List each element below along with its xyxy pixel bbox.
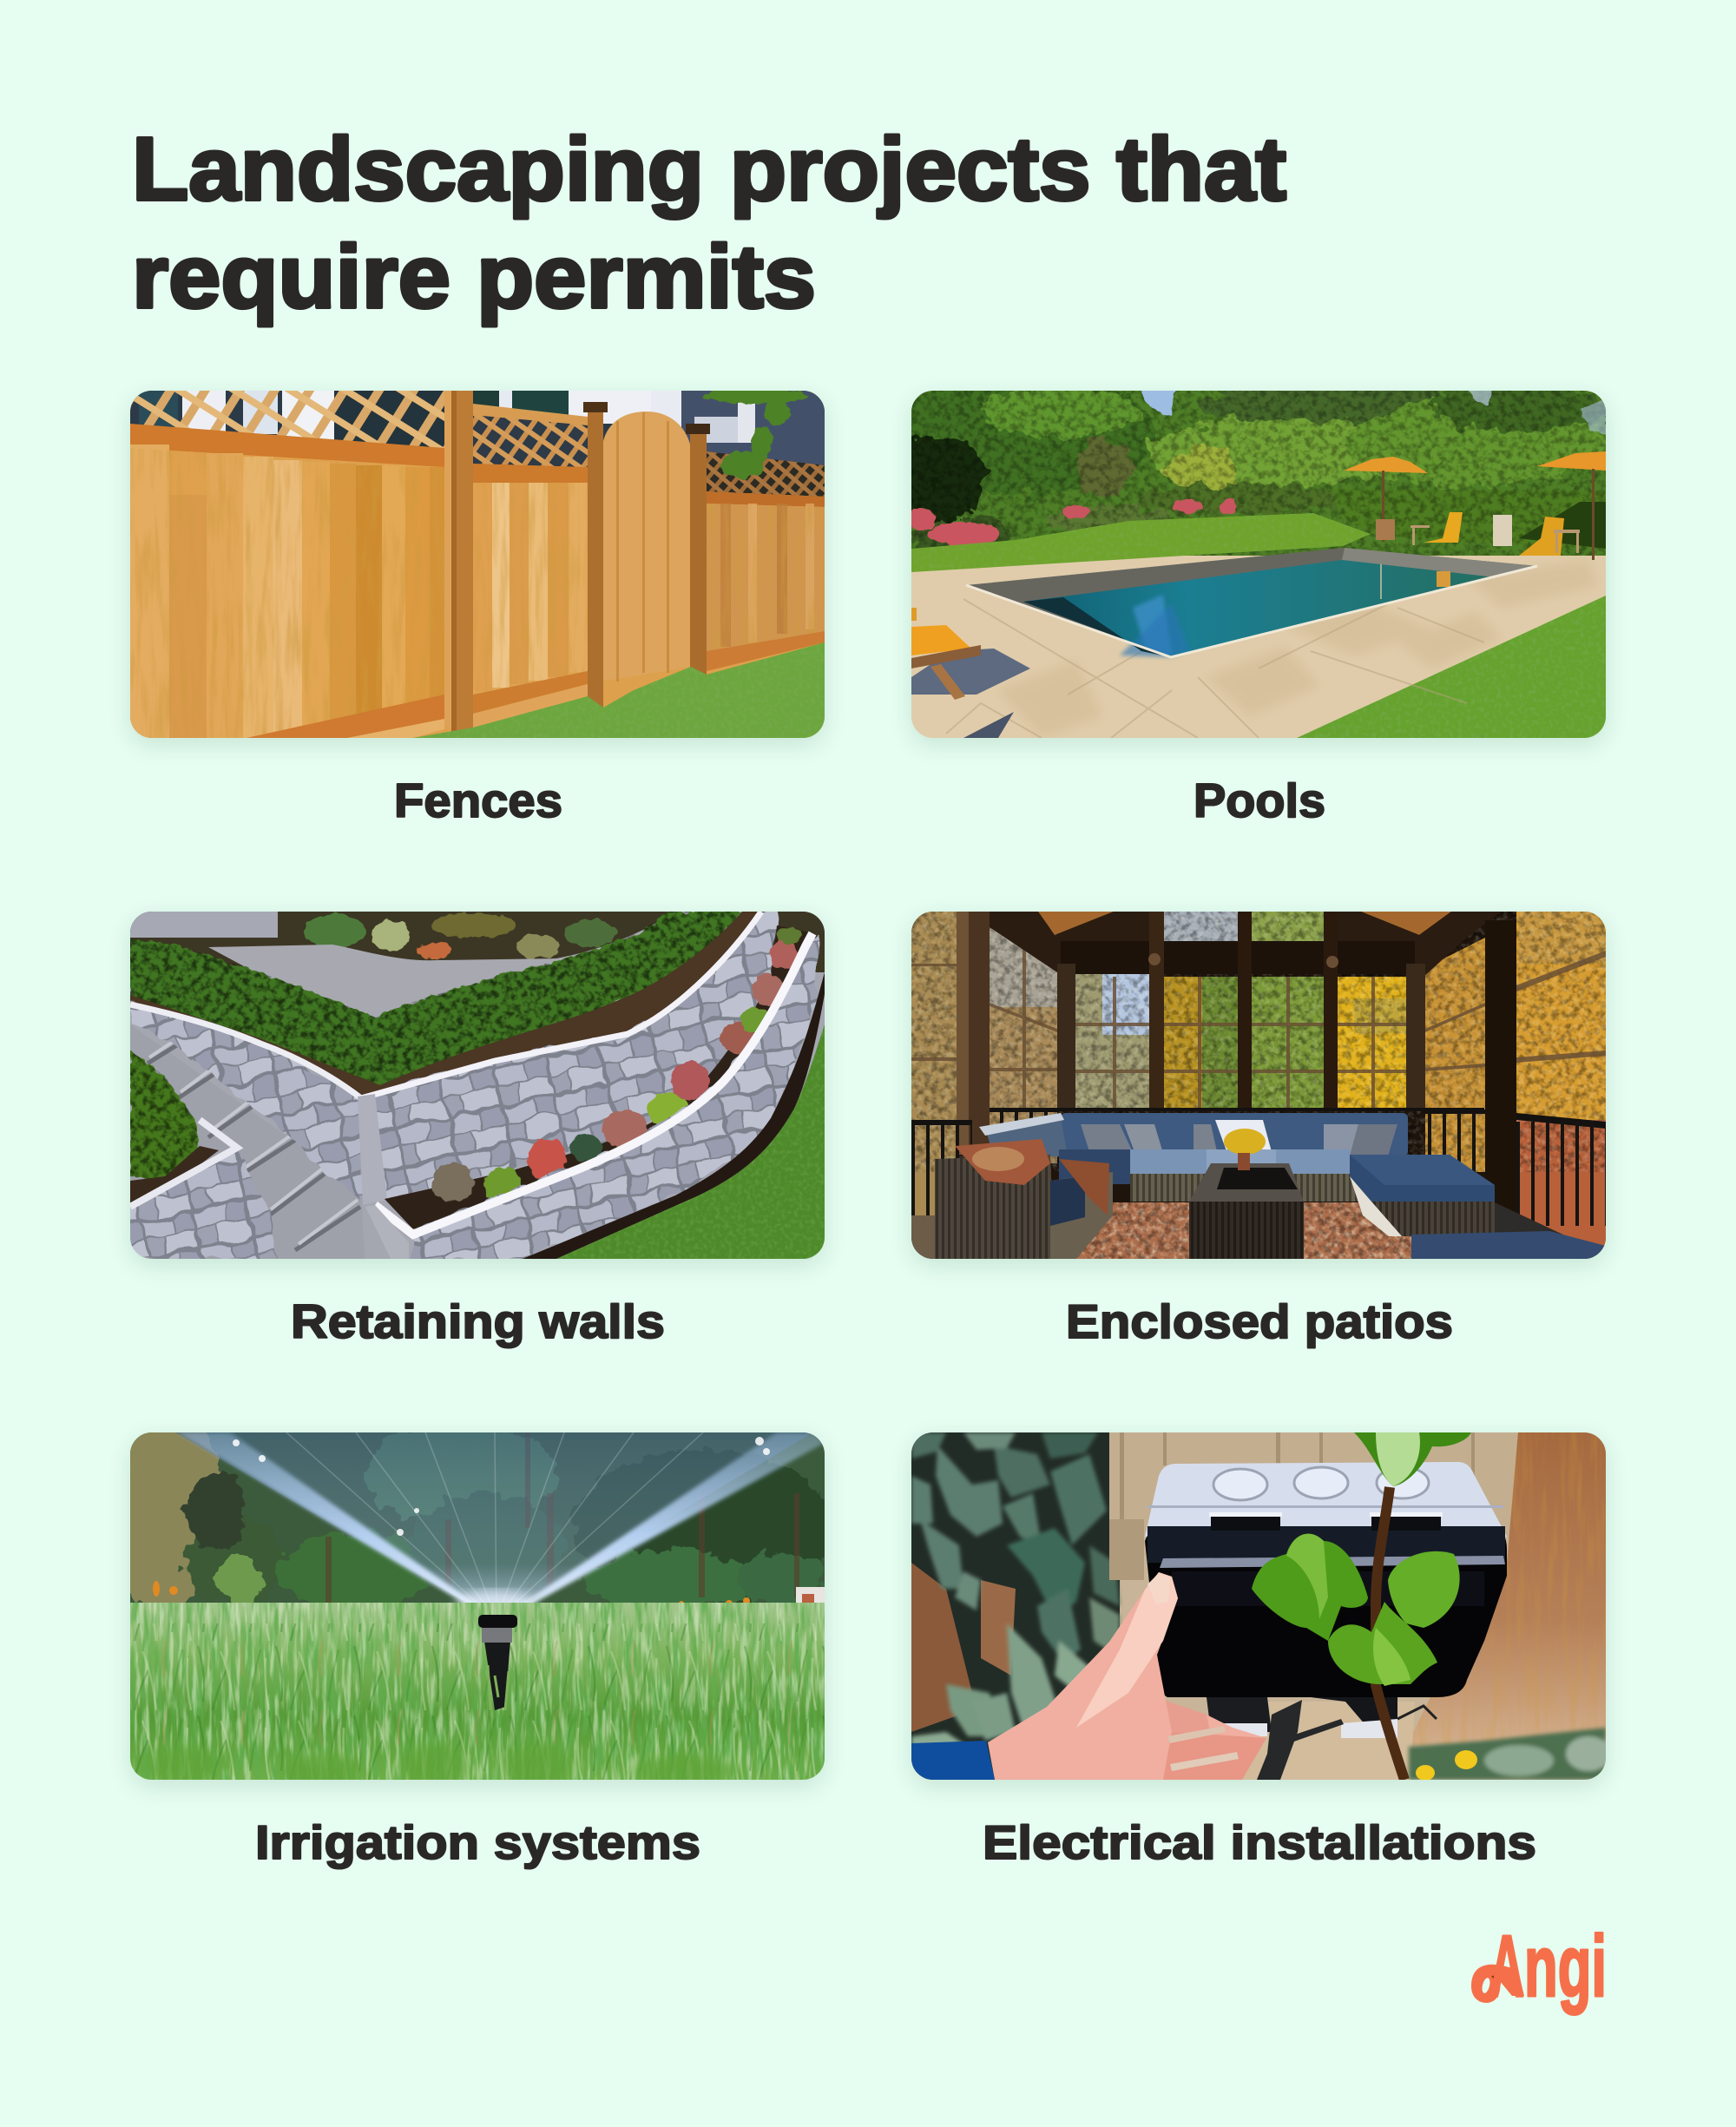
paving slabs — [998, 560, 1597, 738]
panel: fences — [130, 388, 825, 827]
railing — [911, 1108, 1606, 1226]
label: irrigation systems: Irrigation systems — [255, 1815, 700, 1869]
armchair — [935, 1139, 1113, 1259]
ottoman — [1350, 1155, 1495, 1236]
sky — [1141, 391, 1606, 434]
logo: Angi: A — [1489, 1918, 1524, 2015]
ivy background — [911, 1432, 1120, 1780]
rug — [1050, 1202, 1441, 1259]
right wood panel — [1406, 1432, 1606, 1747]
background trees — [104, 1411, 833, 1610]
stairs — [130, 1024, 365, 1259]
panel: electrical installations — [911, 1432, 1611, 1869]
label: pools: Pools — [1194, 774, 1325, 827]
box body — [1145, 1526, 1507, 1697]
sprinkler head — [478, 1615, 517, 1710]
foliage bottom right — [1409, 1728, 1611, 1780]
hedge — [130, 912, 742, 1088]
photo: wooden fence — [130, 388, 825, 738]
bottom clips — [1207, 1697, 1437, 1780]
hedge — [1332, 489, 1606, 549]
bottom rail panel 1 — [247, 695, 444, 738]
upper garden — [130, 912, 825, 972]
leaves — [1252, 1432, 1471, 1686]
concrete path — [208, 912, 755, 1016]
label: fences: Fences — [394, 774, 562, 827]
label: electrical installations: Electrical installations — [983, 1815, 1536, 1869]
label: retaining walls: Retaining walls — [291, 1294, 665, 1348]
lawn back — [911, 513, 1371, 572]
lower wall — [409, 932, 819, 1259]
blue sleeve — [911, 1741, 995, 1780]
lawn — [556, 1024, 825, 1259]
lattice panel 2 — [473, 416, 490, 417]
lawn front — [1297, 596, 1606, 738]
left wall of stairs — [130, 1003, 365, 1207]
photo: sprinkler — [104, 1411, 833, 1793]
left hedge — [130, 1050, 200, 1181]
photo: retaining walls — [130, 912, 825, 1259]
lower wood — [1237, 1702, 1415, 1780]
sofa seats — [1059, 1149, 1373, 1202]
top rail panel 1 — [130, 424, 444, 469]
fence wood — [1109, 1432, 1526, 1537]
umbrellas and furniture — [1344, 451, 1606, 560]
flowers — [908, 499, 1237, 546]
box lid — [1145, 1462, 1507, 1537]
title — [132, 119, 1286, 326]
navy cushion foreground — [1411, 1231, 1606, 1259]
coffee table and flowers — [1189, 1129, 1304, 1259]
photo: enclosed patio — [911, 912, 1606, 1259]
hand — [988, 1572, 1266, 1780]
photo: electrical box — [911, 1432, 1611, 1781]
bottom rail panel 2 — [473, 671, 588, 714]
lounger — [911, 608, 1030, 738]
plant stem — [1376, 1487, 1404, 1780]
grass — [130, 1603, 825, 1780]
sofa back cushions — [979, 1113, 1408, 1172]
posts and gate — [444, 391, 710, 738]
panel: pools — [890, 373, 1606, 827]
lower-left wall — [130, 1149, 278, 1259]
upper wall — [361, 912, 778, 1199]
label: enclosed patios: Enclosed patios — [1066, 1294, 1453, 1348]
frame — [957, 912, 1516, 1215]
pool — [966, 548, 1537, 657]
lattice panel 1 — [130, 391, 444, 451]
panel: retaining walls — [130, 912, 825, 1348]
soil under hedge — [130, 912, 761, 1096]
title: require permits — [132, 227, 816, 326]
planter soil — [385, 925, 809, 1229]
logo: Angi: ngi — [1524, 1918, 1607, 2015]
grass — [413, 642, 825, 738]
boards panel 2 — [473, 483, 588, 695]
box latches — [1209, 1512, 1443, 1531]
right fence run — [707, 451, 825, 671]
title: Landscaping projects that — [132, 119, 1286, 219]
trees — [911, 391, 1606, 549]
photo: pool — [890, 373, 1606, 738]
planter flowers — [432, 927, 802, 1202]
panel: irrigation systems — [104, 1411, 833, 1869]
rail panel 2 — [473, 464, 588, 483]
mullions — [911, 946, 1606, 1110]
logo: Angi — [1471, 1918, 1607, 2015]
boards panel 1 — [130, 444, 444, 738]
panel: enclosed patios — [911, 912, 1606, 1348]
outer soil — [523, 972, 825, 1259]
tree leaves — [703, 388, 807, 478]
windows — [911, 912, 1606, 1246]
water spray — [175, 1432, 825, 1620]
floor — [1397, 1198, 1606, 1259]
